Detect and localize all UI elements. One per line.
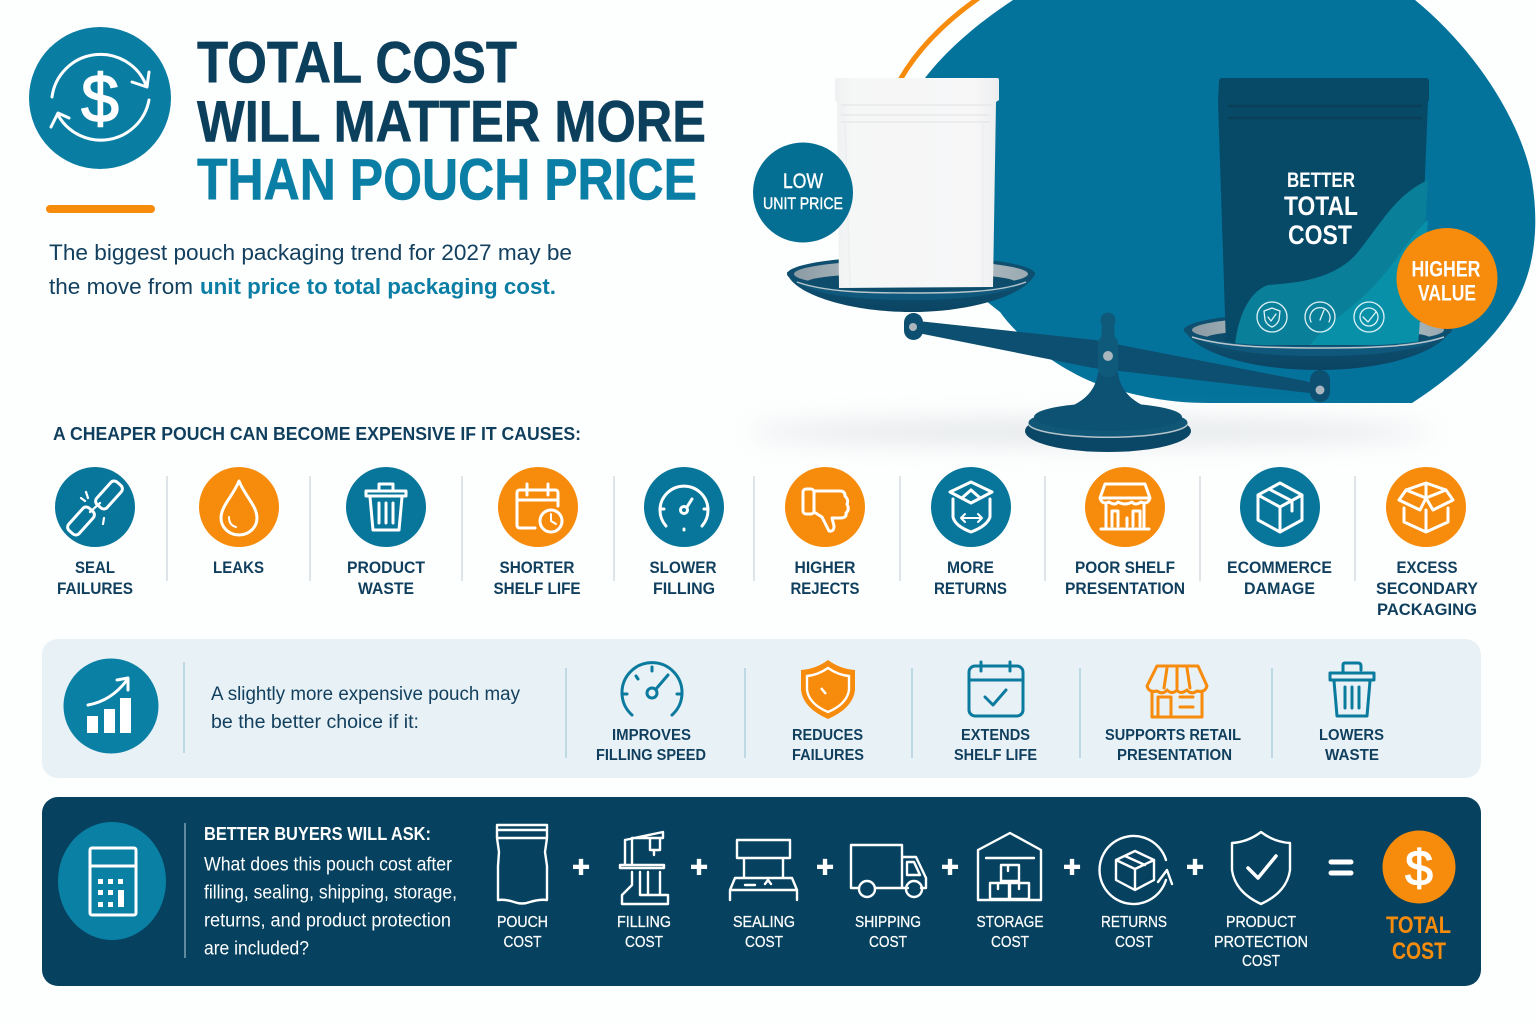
buyers question text — [204, 824, 457, 960]
total cost result: $ — [1405, 840, 1433, 896]
orange arc — [900, 0, 980, 80]
cost: shipping — [851, 845, 926, 951]
plus: + — [941, 851, 959, 884]
title — [197, 30, 706, 212]
panel: better choice — [42, 639, 1481, 778]
icon: calculator — [58, 822, 166, 940]
cause: more returns — [931, 467, 1011, 598]
orange accent bar — [46, 205, 155, 213]
cost: product protection: COST — [1242, 953, 1280, 970]
intro text: The biggest pouch packaging trend for 2027 may be — [49, 240, 572, 265]
section heading: causes: A CHEAPER POUCH CAN BECOME EXPENSIVE IF IT CAUSES: — [53, 424, 581, 444]
cause: excess secondary packaging: SECONDARY — [1376, 579, 1479, 598]
benefit: improves filling speed: IMPROVES — [612, 727, 691, 744]
benefit: improves filling speed: FILLING SPEED — [596, 747, 706, 764]
cost: pouch: POUCH — [497, 914, 548, 931]
cost: storage: STORAGE — [976, 914, 1044, 931]
cause: slower filling: SLOWER — [650, 558, 716, 577]
plus: + — [572, 851, 590, 884]
total cost result — [1382, 830, 1456, 965]
cause: shorter shelf life — [494, 467, 580, 598]
left scale pan — [787, 256, 1035, 312]
badge: low unit price — [753, 142, 853, 242]
cause: ecommerce damage: DAMAGE — [1244, 579, 1315, 598]
cost: storage — [976, 833, 1044, 951]
cause: poor shelf presentation: POOR SHELF — [1075, 558, 1175, 577]
plus: + — [1186, 851, 1204, 884]
cause: slower filling — [644, 467, 724, 598]
buyers question text: are included? — [204, 938, 309, 960]
cause: higher rejects — [785, 467, 865, 598]
dark pouch: better total cost: TOTAL — [1284, 191, 1358, 221]
cost: returns — [1100, 836, 1172, 951]
cost: storage: COST — [991, 934, 1029, 951]
benefit: lowers waste: WASTE — [1325, 747, 1379, 764]
plus: + — [1063, 851, 1081, 884]
cost: sealing: COST — [745, 934, 783, 951]
cost: sealing: SEALING — [733, 914, 795, 931]
cost: filling — [617, 832, 671, 951]
buyers question text: returns, and product protection — [204, 910, 451, 932]
plus: + — [816, 851, 834, 884]
plus: + — [690, 851, 708, 884]
better choice text: A slightly more expensive pouch may — [211, 684, 520, 705]
cost: product protection: PRODUCT — [1226, 914, 1296, 931]
cost: returns: COST — [1115, 934, 1153, 951]
cause: seal failures — [55, 467, 135, 598]
benefit: reduces failures: REDUCES — [792, 727, 863, 744]
cost: product protection: PROTECTION — [1214, 934, 1308, 951]
buyers question text: What does this pouch cost after — [204, 854, 453, 876]
scale stand — [1025, 312, 1191, 452]
better choice text — [211, 684, 520, 733]
cause: more returns: MORE — [947, 558, 994, 577]
cost: shipping: COST — [869, 934, 907, 951]
benefit: lowers waste: LOWERS — [1319, 727, 1384, 744]
benefit: lowers waste — [1319, 663, 1384, 764]
cause: shorter shelf life: SHELF LIFE — [494, 579, 580, 598]
pouch badge icons — [1257, 302, 1384, 332]
cost: shipping: SHIPPING — [855, 914, 921, 931]
teal background blob — [904, 0, 1535, 403]
benefit: extends shelf life — [954, 662, 1037, 764]
cost: filling: FILLING — [617, 914, 671, 931]
dark pouch: better total cost — [1218, 78, 1429, 345]
intro text — [49, 240, 572, 299]
header icon: dollar in circular arrows: $ — [81, 61, 119, 137]
benefit: supports retail presentation — [1105, 666, 1241, 764]
dark pouch: better total cost: BETTER — [1287, 169, 1355, 192]
cause: excess secondary packaging — [1376, 467, 1479, 619]
cost: filling: COST — [625, 934, 663, 951]
benefit: reduces failures: FAILURES — [792, 747, 864, 764]
white pouch — [835, 78, 999, 288]
badge: higher value — [1396, 228, 1498, 329]
benefit: supports retail presentation: SUPPORTS RETAIL — [1105, 727, 1241, 744]
cause: leaks — [199, 467, 279, 577]
badge: low unit price: LOW — [783, 170, 823, 193]
header icon: dollar in circular arrows — [29, 27, 171, 169]
cause: product waste — [346, 467, 426, 598]
cause: seal failures: FAILURES — [57, 579, 133, 598]
cause: shorter shelf life: SHORTER — [500, 558, 574, 577]
causes row dividers — [167, 476, 1355, 581]
title: WILL MATTER MORE — [197, 90, 706, 154]
title: THAN POUCH PRICE — [197, 148, 697, 212]
cause: seal failures: SEAL — [75, 558, 115, 577]
total cost result: COST — [1392, 938, 1446, 965]
icon: growth chart — [64, 658, 158, 754]
cause: ecommerce damage: ECOMMERCE — [1227, 558, 1332, 577]
cause: product waste: WASTE — [358, 579, 414, 598]
intro text: the move from — [49, 274, 193, 299]
cause: more returns: RETURNS — [934, 579, 1007, 598]
ground shadow — [750, 421, 1430, 443]
cause: product waste: PRODUCT — [347, 558, 426, 577]
benefit: extends shelf life: EXTENDS — [961, 727, 1030, 744]
right pan front lip — [1188, 335, 1448, 356]
cause: poor shelf presentation: PRESENTATION — [1065, 579, 1185, 598]
buyers question text: filling, sealing, shipping, storage, — [204, 882, 457, 904]
cause: excess secondary packaging: EXCESS — [1396, 558, 1458, 577]
scale beam — [904, 313, 1330, 402]
benefit: improves filling speed — [596, 663, 706, 764]
dark pouch: better total cost: COST — [1288, 220, 1352, 250]
benefit: reduces failures — [792, 660, 864, 764]
buyers question text: BETTER BUYERS WILL ASK: — [204, 824, 431, 844]
title: TOTAL COST — [197, 30, 517, 96]
cause: higher rejects: HIGHER — [794, 558, 856, 577]
better choice text: be the better choice if it: — [211, 712, 419, 733]
equals — [1331, 862, 1351, 873]
cause: ecommerce damage — [1227, 467, 1332, 598]
cause: higher rejects: REJECTS — [790, 579, 860, 598]
badge: higher value: HIGHER — [1412, 256, 1481, 282]
cause: slower filling: FILLING — [653, 579, 715, 598]
intro text: unit price to total packaging cost. — [200, 274, 556, 299]
cause: poor shelf presentation — [1065, 467, 1185, 598]
right scale pan — [1184, 312, 1452, 370]
cost: pouch: COST — [504, 934, 542, 951]
panel: total cost equation — [42, 797, 1481, 986]
badge: higher value: VALUE — [1418, 280, 1476, 306]
cost: product protection — [1214, 832, 1308, 970]
cause: leaks: LEAKS — [213, 558, 264, 577]
total cost result: TOTAL — [1386, 912, 1451, 939]
badge: low unit price: UNIT PRICE — [763, 194, 843, 213]
cost: returns: RETURNS — [1101, 914, 1167, 931]
cost: pouch — [497, 825, 548, 951]
left pan front lip — [793, 280, 1029, 300]
hero: scale comparison illustration — [750, 0, 1535, 452]
benefit: supports retail presentation: PRESENTATION — [1117, 747, 1232, 764]
benefit: extends shelf life: SHELF LIFE — [954, 747, 1037, 764]
cost: sealing — [730, 840, 797, 951]
cause: excess secondary packaging: PACKAGING — [1377, 600, 1477, 619]
